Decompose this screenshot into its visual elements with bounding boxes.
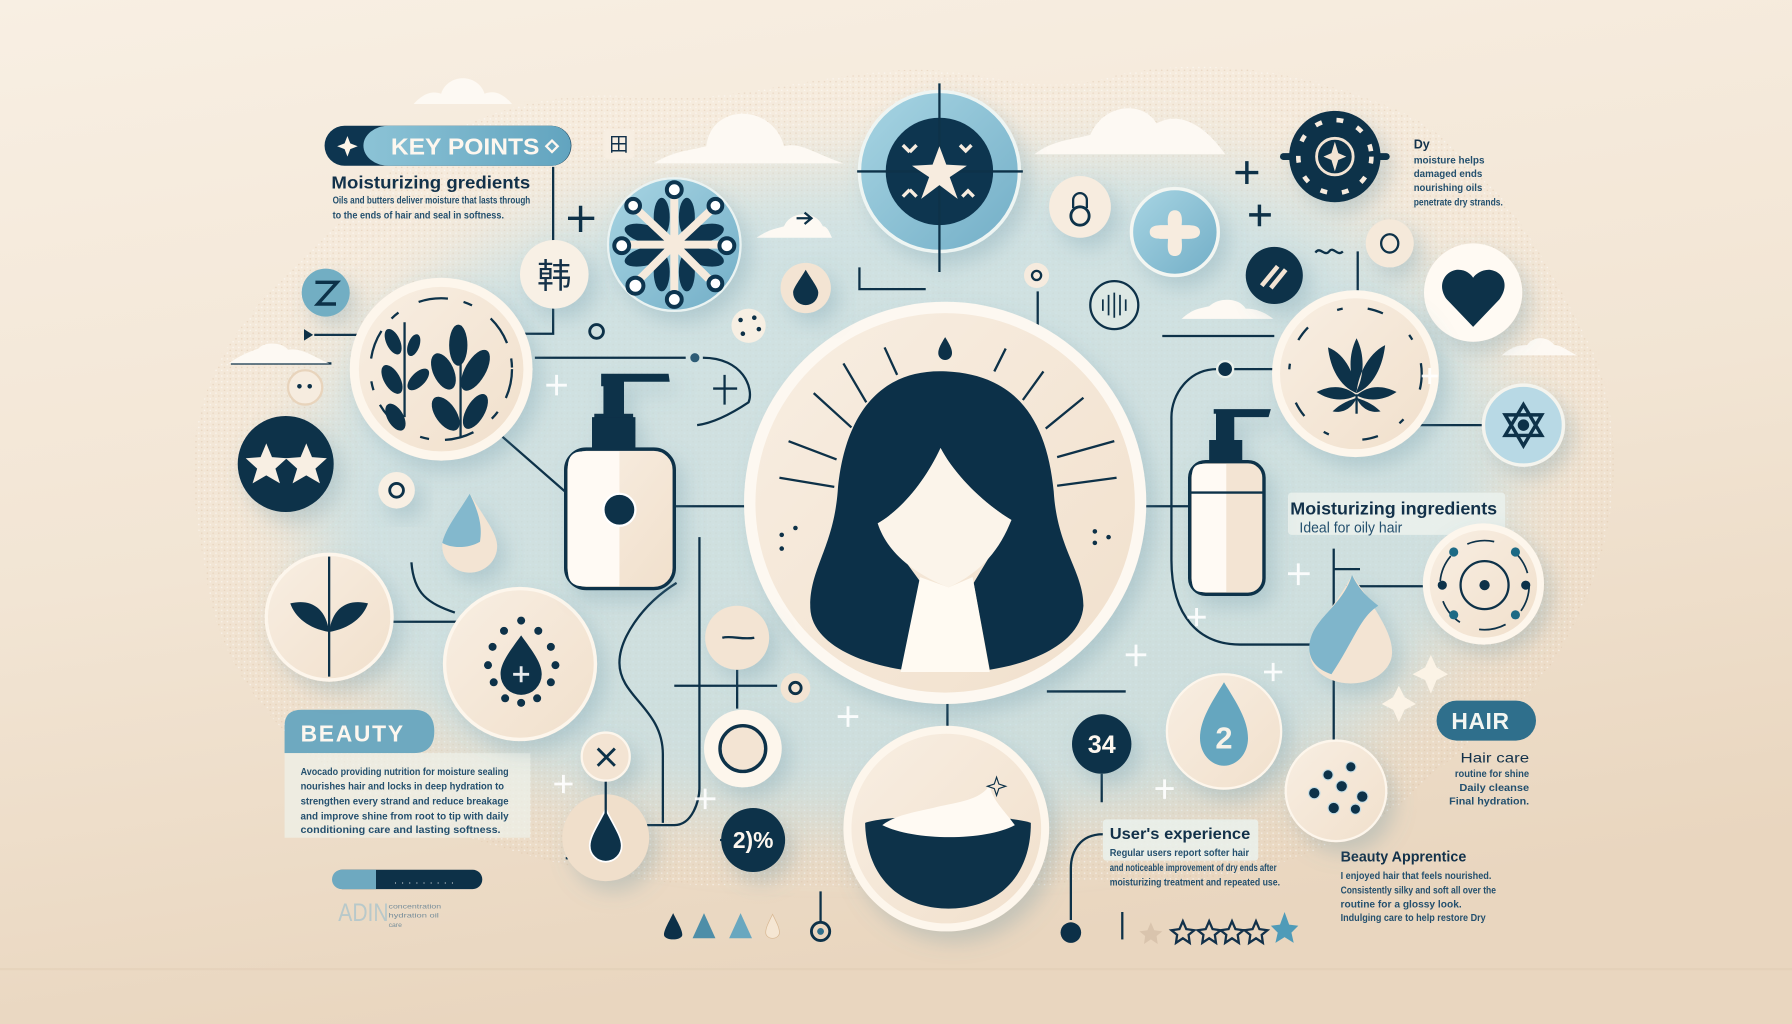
faded legend: ADIN bbox=[338, 899, 389, 927]
panel: dry hair note: damaged ends bbox=[1414, 169, 1482, 180]
panel: hair: HAIR bbox=[1451, 708, 1510, 734]
panel: moisturizing ingredients bbox=[1288, 493, 1505, 537]
icon: ring badge bbox=[378, 472, 415, 509]
panel: dry hair note: Dy bbox=[1414, 138, 1430, 152]
icon: dots circle bbox=[1286, 741, 1386, 841]
panel: user's experience: Regular users report softer hair bbox=[1110, 848, 1249, 859]
icon: lock badge bbox=[1049, 176, 1111, 238]
faded legend bbox=[338, 899, 441, 929]
icon: dotted cookie bbox=[731, 309, 766, 343]
panel: beauty: and improve shine from root to tip with daily bbox=[301, 811, 509, 822]
icon: sprout circle bbox=[266, 554, 392, 680]
panel: user's experience: moisturizing treatment and repeated use. bbox=[1110, 878, 1280, 889]
icon: x badge bbox=[582, 733, 630, 781]
panel: beauty experience: Consistently silky and soft all over the bbox=[1341, 886, 1497, 897]
icon: glyph badge: 韩 bbox=[537, 258, 571, 296]
panel: moisturizing ingredients: Moisturizing ingredients bbox=[1290, 498, 1497, 518]
panel: hair: routine for shine bbox=[1455, 769, 1530, 780]
panel: beauty experience bbox=[1341, 850, 1497, 924]
icon: rings circle bbox=[1423, 523, 1544, 645]
icon: sparkles bbox=[1382, 655, 1448, 722]
icon: small drop badge bbox=[781, 263, 831, 313]
icon: arrow on cloud bbox=[797, 213, 811, 224]
main portrait circle bbox=[744, 302, 1146, 704]
icon: ring node bbox=[781, 673, 810, 703]
panel: beauty: Avocado providing nutrition for moisture sealing bbox=[301, 767, 509, 778]
panel: beauty experience: Beauty Apprentice bbox=[1341, 850, 1466, 866]
icon: heart badge bbox=[1424, 243, 1522, 342]
panel: key points: KEY POINTS bbox=[391, 133, 539, 159]
stat: 2x percent bbox=[721, 808, 785, 872]
panel: user's experience: User's experience bbox=[1110, 826, 1251, 843]
hair bbox=[810, 371, 1083, 670]
panel: beauty: nourishes hair and locks in deep hydration to bbox=[301, 782, 504, 793]
icon: small square glyph: 田 bbox=[609, 134, 629, 156]
icon: ring tablet bbox=[1366, 219, 1414, 267]
icon: node on line bbox=[1024, 263, 1049, 288]
icon: half-blue drop bbox=[442, 494, 497, 573]
icon: blue clover badge bbox=[1131, 189, 1218, 275]
panel: beauty: conditioning care and lasting softness. bbox=[301, 825, 501, 836]
icon: dark ball bbox=[1061, 922, 1081, 943]
icon: droplet dots circle bbox=[445, 589, 595, 739]
icon: leaf circle left bbox=[350, 278, 533, 461]
icon: large ring badge bbox=[704, 710, 782, 787]
icon: tilde bbox=[1315, 250, 1343, 253]
dotted backdrop blob bbox=[194, 67, 1614, 890]
panel: key points: Oils and butters deliver moisture that lasts through bbox=[333, 195, 530, 206]
panel: dry hair note: nourishing oils bbox=[1414, 183, 1482, 194]
bottom drops row bbox=[664, 913, 779, 939]
stat: 34: 34 bbox=[1088, 731, 1116, 759]
icon: blue flower badge bbox=[608, 178, 741, 311]
icon: dark slash pill bbox=[1246, 247, 1303, 304]
progress bar bbox=[332, 870, 482, 889]
faded legend: concentration bbox=[389, 904, 441, 911]
icon: top star badge bbox=[857, 83, 1023, 272]
icon: small square glyph bbox=[603, 129, 634, 159]
icon: minus badge bbox=[705, 606, 769, 670]
panel: user's experience: and noticeable improvement of dry ends after bbox=[1110, 863, 1277, 874]
panel: key points bbox=[325, 126, 571, 221]
stat: 2x percent: 2)% bbox=[733, 827, 773, 853]
panel: beauty: strengthen every strand and reduce breakage bbox=[301, 797, 509, 808]
clouds bbox=[229, 78, 1577, 363]
connector lines bbox=[231, 167, 1483, 923]
panel: user's experience bbox=[1103, 819, 1280, 889]
faded legend: care bbox=[389, 922, 402, 929]
icon: left pump bottle bbox=[566, 374, 674, 589]
panel: dry hair note bbox=[1414, 138, 1503, 209]
panel: beauty experience: routine for a glossy look. bbox=[1341, 899, 1462, 910]
panel: hair: Final hydration. bbox=[1449, 797, 1529, 808]
icon: striped circle bbox=[1090, 281, 1138, 329]
icon: blue z badge bbox=[302, 269, 350, 317]
neck bbox=[901, 577, 990, 672]
bottom shadow line bbox=[0, 968, 1792, 970]
face bbox=[878, 448, 1011, 587]
plus marks bbox=[304, 161, 1438, 809]
panel: beauty: BEAUTY bbox=[301, 721, 405, 747]
icon: glyph badge bbox=[520, 240, 589, 309]
side dots bbox=[779, 526, 1111, 551]
icon: dark drop in circle bbox=[562, 782, 649, 881]
panel: key points: Moisturizing gredients bbox=[331, 173, 530, 193]
icon: right pump bottle bbox=[1190, 409, 1271, 594]
icon: cannabis leaf circle bbox=[1272, 290, 1439, 457]
icon: number drop badge: 2 bbox=[1215, 721, 1233, 756]
panel: hair: Hair care bbox=[1461, 750, 1530, 765]
panel: key points: to the ends of hair and seal in softness. bbox=[333, 210, 504, 221]
panel: hair bbox=[1437, 701, 1536, 808]
panel: beauty bbox=[285, 710, 530, 838]
icon: star of david badge bbox=[1483, 385, 1563, 465]
panel: dry hair note: moisture helps bbox=[1414, 155, 1485, 166]
panel: moisturizing ingredients: Ideal for oily hair bbox=[1299, 521, 1402, 537]
icon: stars badge bbox=[238, 416, 334, 512]
panel: beauty experience: Indulging care to help restore Dry bbox=[1341, 913, 1486, 924]
stat: 34 bbox=[1072, 714, 1131, 774]
panel: dry hair note: penetrate dry strands. bbox=[1414, 198, 1503, 209]
icon: small face badge bbox=[288, 370, 322, 405]
star rating bbox=[1122, 912, 1298, 944]
icon: number drop badge bbox=[1167, 674, 1281, 789]
icon: large blue drop bbox=[1309, 575, 1392, 683]
faded legend: hydration oil bbox=[389, 913, 440, 920]
rays bbox=[779, 337, 1117, 487]
progress bar: ......... bbox=[394, 875, 458, 885]
icon: ring node bottom bbox=[811, 922, 830, 941]
icon: bowl of cream bbox=[843, 726, 1049, 931]
panel: hair: Daily cleanse bbox=[1459, 783, 1530, 794]
panel: beauty experience: I enjoyed hair that feels nourished. bbox=[1341, 871, 1492, 882]
icon: dark compass badge bbox=[1280, 111, 1390, 202]
